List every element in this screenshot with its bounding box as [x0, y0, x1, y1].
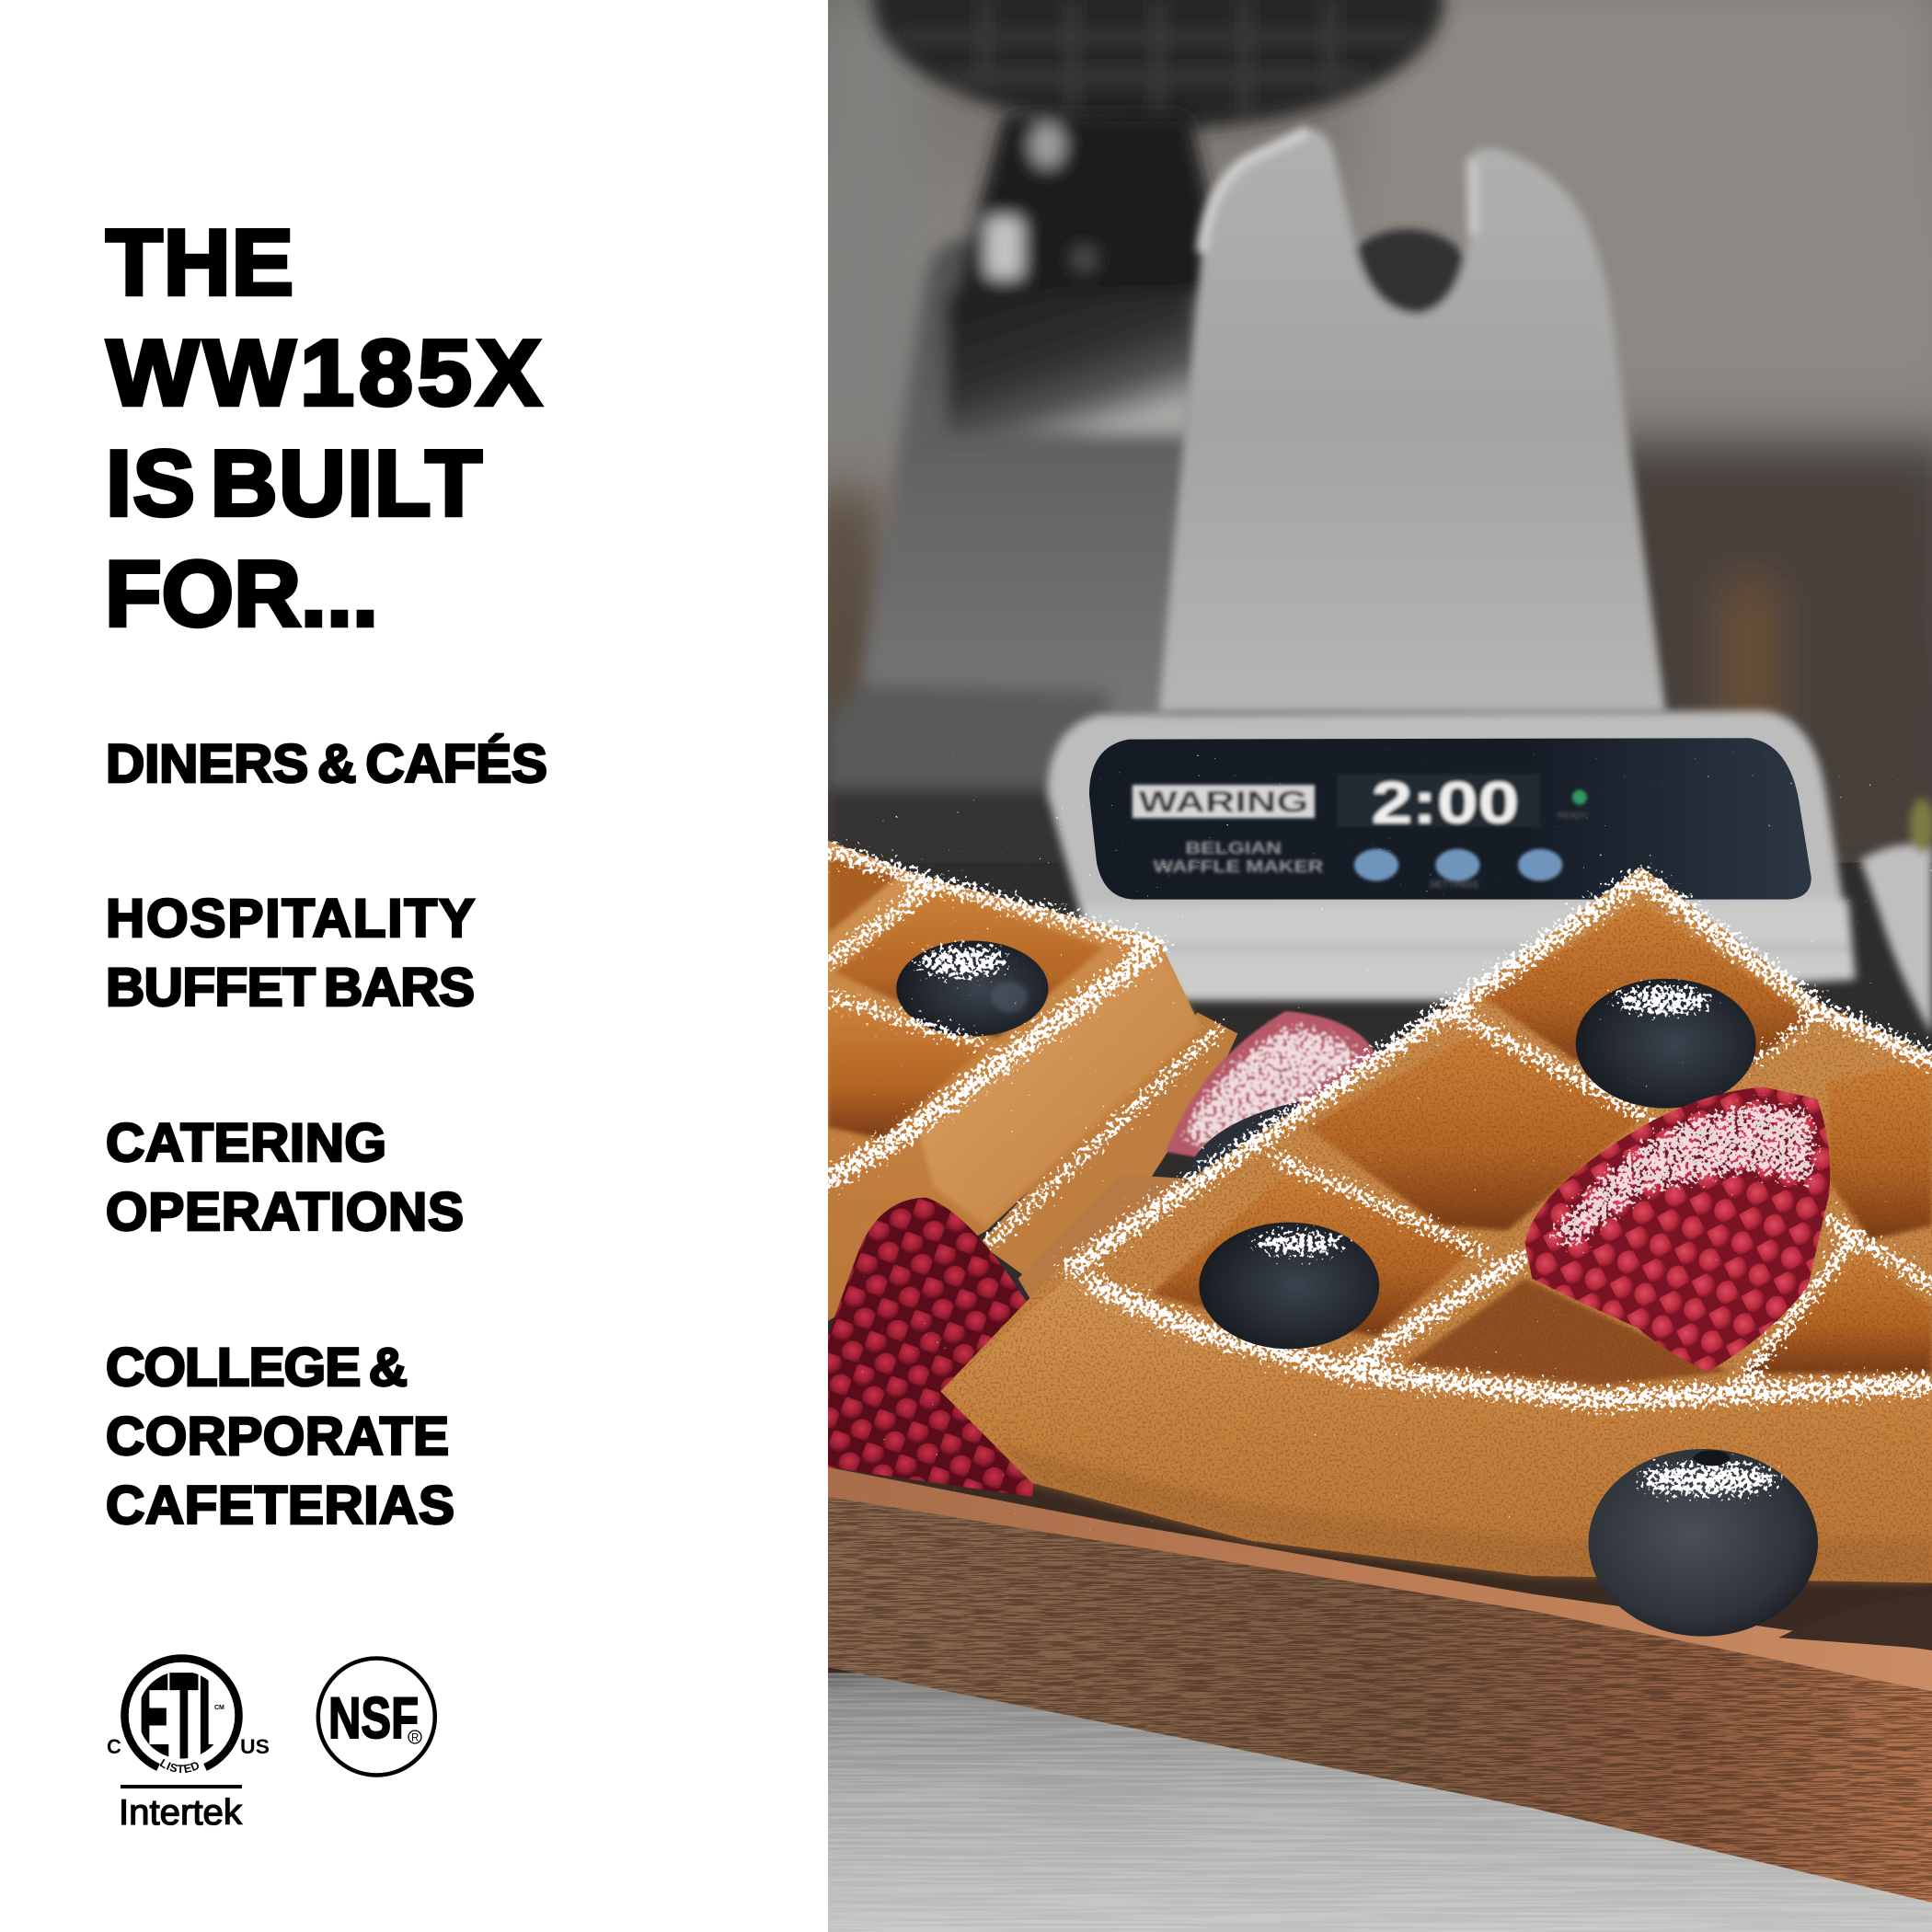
left white panel	[0, 0, 828, 1932]
photo background: blurred kitchen wall	[828, 0, 1932, 863]
icon: ETL listed Intertek certification mark: C	[107, 1735, 121, 1758]
icon: ETL listed Intertek certification mark: Intertek	[119, 1793, 243, 1833]
left waffle	[828, 841, 1202, 1321]
model label: BELGIAN	[1185, 838, 1282, 857]
title	[105, 212, 541, 646]
waffle cell group, big waffle	[1152, 902, 1932, 1386]
shaded underside	[997, 1441, 1932, 1582]
waffle cell group, left	[828, 857, 1200, 1225]
model label	[1154, 838, 1324, 876]
model label: WAFFLE MAKER	[1154, 857, 1324, 876]
title: THE	[106, 212, 293, 315]
venue: catering operations: OPERATIONS	[106, 1182, 464, 1242]
waffle cell: right	[1828, 1061, 1932, 1240]
venue: college and corporate cafeterias: CAFETERIAS	[106, 1476, 454, 1535]
control buttons: SETTINGS	[1430, 879, 1478, 890]
blueberry on left waffle	[896, 940, 1049, 1037]
title: IS BUILT	[106, 432, 482, 535]
control panel	[1089, 738, 1811, 900]
waffle cell: top left	[828, 857, 900, 934]
venue: college and corporate cafeterias	[106, 1338, 454, 1535]
venue: college and corporate cafeterias: COLLEGE &	[106, 1338, 408, 1397]
waffle iron plate in back, out of focus	[872, 0, 1444, 130]
waffle cell: center	[1306, 1032, 1649, 1231]
lower left waffle layer	[980, 1013, 1237, 1306]
ready light	[1558, 789, 1588, 820]
title: FOR...	[105, 543, 378, 646]
timer display	[1338, 775, 1540, 827]
venue: catering operations: CATERING	[106, 1113, 386, 1173]
venue: hospitality buffet bars: HOSPITALITY	[106, 889, 475, 949]
icon: ETL listed Intertek certification mark: ETL	[139, 1648, 226, 1787]
venue: college and corporate cafeterias: CORPORATE	[106, 1407, 449, 1466]
blueberry behind big waffle	[1187, 1101, 1300, 1177]
icon: ETL listed Intertek certification mark	[107, 1654, 270, 1833]
list of venues	[106, 733, 547, 1535]
waffle front face	[940, 1275, 1932, 1582]
waffle cell: bottom center	[1406, 1279, 1730, 1386]
venue: hospitality buffet bars	[106, 889, 475, 1018]
icon: NSF certification mark: R	[411, 1733, 419, 1744]
big waffle	[940, 867, 1932, 1582]
wooden tray inner surface	[828, 1455, 1932, 1673]
powdered sugar on big waffle	[1071, 878, 1932, 1399]
left raspberry	[828, 1198, 1071, 1497]
waffle surface pores	[940, 867, 1932, 1582]
big raspberry	[1525, 1087, 1830, 1372]
foreground food scene	[828, 841, 1932, 1932]
fragment of waffle behind	[1018, 1175, 1187, 1314]
top blueberry	[1576, 979, 1756, 1109]
sugar on left waffle	[828, 850, 1219, 1247]
photo panel: waffle maker and waffles	[813, 0, 1932, 1932]
front left blueberry	[1199, 1223, 1379, 1349]
raspberry behind big waffle, out of focus	[1166, 1011, 1378, 1159]
title: WW185X	[107, 320, 541, 424]
waffle cell: front left	[1152, 1173, 1479, 1337]
table under the machine	[828, 863, 1932, 1335]
wooden tray	[828, 1467, 1932, 1903]
blurred background shapes	[828, 0, 1932, 760]
waffle cell: lower left	[828, 1004, 984, 1139]
waffle cell: bottom right	[1743, 1250, 1932, 1374]
front right blueberry	[1589, 1449, 1818, 1637]
waffle cell: top	[1483, 902, 1813, 1071]
icon: ETL listed Intertek certification mark: US	[240, 1735, 270, 1758]
logo badge: WARING	[1139, 786, 1308, 819]
venue: catering operations	[106, 1113, 464, 1242]
timer display: 2:00	[1372, 770, 1519, 836]
logo badge	[1133, 785, 1315, 819]
control buttons	[1354, 849, 1562, 890]
small bowl at right	[1860, 799, 1932, 1035]
icon: NSF certification mark: NSF	[328, 1686, 419, 1751]
ready light: READY	[1558, 811, 1588, 820]
icon: ETL listed Intertek certification mark: CM	[214, 1705, 224, 1711]
waffle cell: with blueberry	[835, 888, 1104, 1038]
waffle side face highlight	[919, 951, 1200, 1225]
rear unit of the waffle maker, out of focus	[828, 113, 1232, 887]
machine base	[1047, 711, 1856, 1001]
icon: NSF certification mark	[318, 1658, 435, 1776]
front stand of the waffle maker	[1158, 131, 1666, 712]
venue: diners and cafes: DINERS & CAFÉS	[106, 733, 547, 794]
counter top	[828, 1659, 1932, 1932]
icon: ETL listed Intertek certification mark: LISTED	[160, 1759, 199, 1773]
venue: hospitality buffet bars: BUFFET BARS	[106, 958, 475, 1018]
